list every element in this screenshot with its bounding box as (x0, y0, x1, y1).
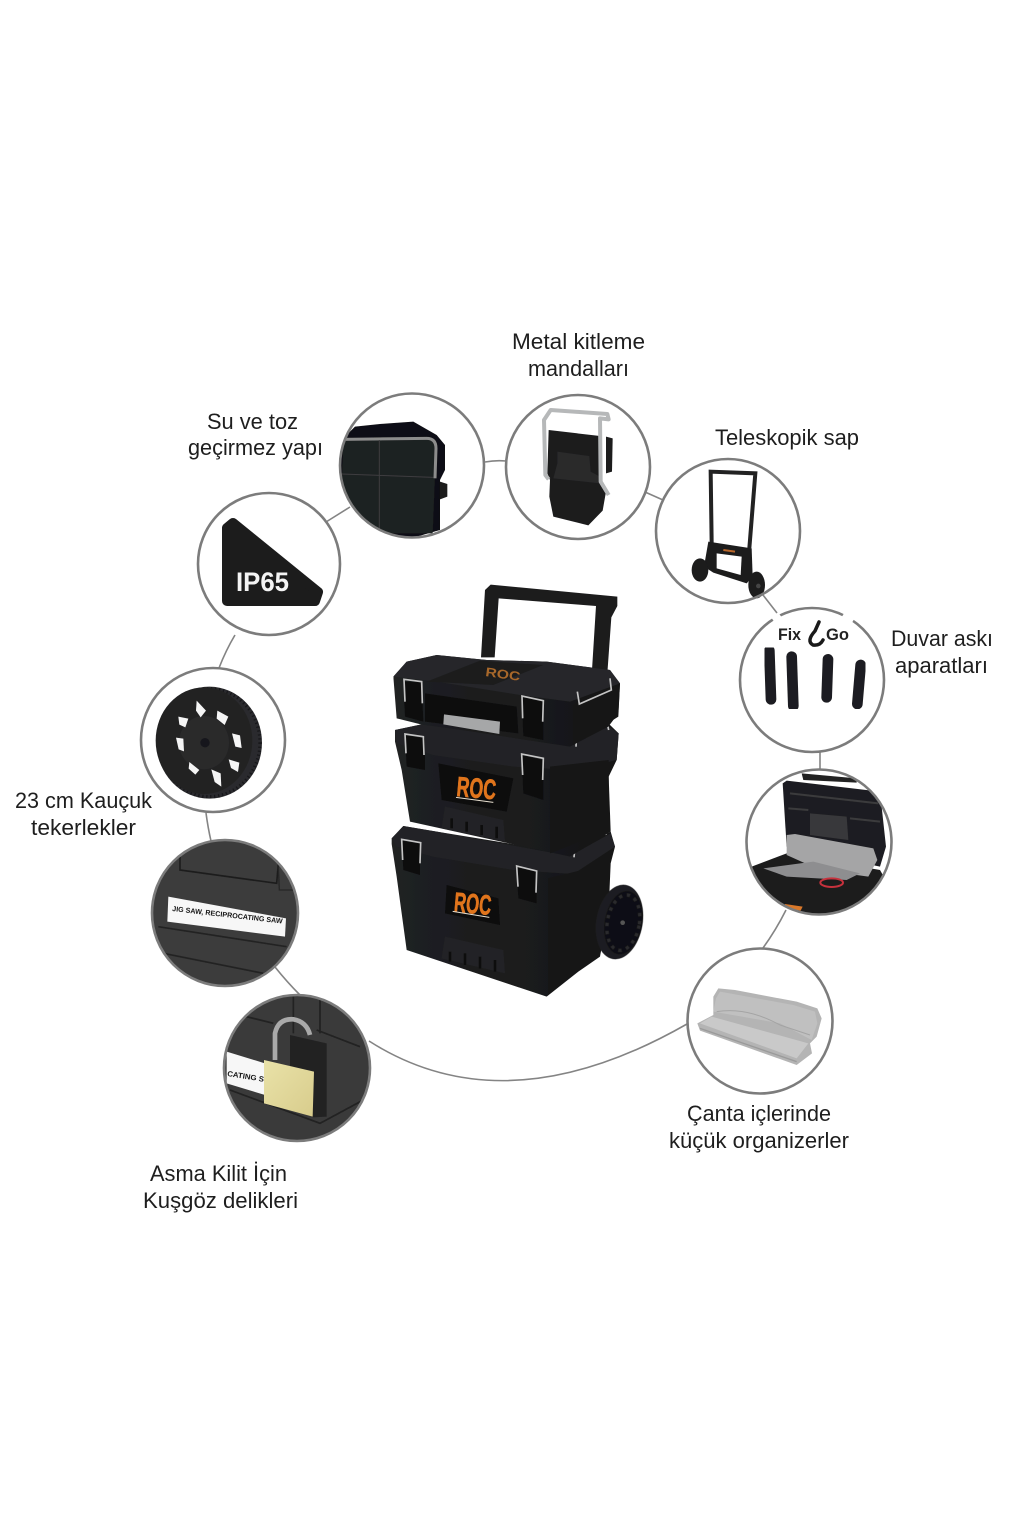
open case image (752, 773, 886, 914)
ROC logo, middle box (455, 771, 497, 805)
wheel spoke openings (176, 701, 242, 787)
ring (224, 995, 370, 1141)
label holder image (150, 838, 300, 988)
middle box (395, 723, 619, 857)
circle: rubber wheel (141, 668, 285, 812)
ROC logo, bottom box: ROC (453, 887, 493, 921)
caption: Duvar askı aparatları (891, 626, 993, 678)
caption: Metal kitleme mandalları (512, 329, 645, 381)
seal detail image (340, 422, 447, 543)
caption: 23 cm Kauçuk tekerlekler: tekerlekler (31, 815, 136, 840)
latch image (544, 410, 613, 525)
ROC logo, lid: ROC (485, 665, 521, 684)
ring (340, 394, 484, 538)
caption: Asma Kilit İçin Kuşgöz delikleri: Kuşgöz delikleri (143, 1188, 298, 1213)
ROC logo, bottom box (453, 887, 493, 921)
caption: 23 cm Kauçuk tekerlekler (15, 788, 153, 840)
caption: 23 cm Kauçuk tekerlekler: 23 cm Kauçuk (15, 788, 153, 813)
label text: JIG SAW, RECIPROCATING SAW (172, 904, 283, 926)
circle: small organizer (688, 948, 832, 1094)
wheel of trolley (590, 881, 649, 963)
caption: Çanta içlerinde küçük organizerler (669, 1101, 849, 1153)
caption: Asma Kilit İçin Kuşgöz delikleri: Asma Kilit İçin (150, 1161, 287, 1186)
circle: waterproof seal (340, 394, 484, 543)
trolley frame image (692, 472, 765, 598)
ring (198, 493, 340, 635)
Fix label: Fix (778, 625, 802, 644)
ring gaps (773, 615, 853, 621)
ring (141, 668, 285, 812)
ring (746, 770, 892, 914)
ring (740, 608, 884, 752)
brackets (769, 651, 861, 706)
ring (688, 948, 832, 1094)
circle: padlock eyelet (222, 993, 372, 1143)
caption: Çanta içlerinde küçük organizerler: Çanta içlerinde (687, 1101, 831, 1126)
ROC logo, middle box: ROC (455, 771, 497, 805)
caption: Su ve toz geçirmez yapı: geçirmez yapı (188, 435, 323, 460)
padlock image (222, 993, 372, 1143)
top organizer box (393, 655, 620, 747)
organizer image (697, 988, 822, 1065)
caption: Su ve toz geçirmez yapı (188, 409, 323, 460)
circle: IP65 badge (198, 493, 340, 635)
main product: stacked ROC tool box trolley (392, 585, 649, 997)
caption: Duvar askı aparatları: Duvar askı (891, 626, 993, 651)
circle: Fix & Go wall brackets (740, 608, 884, 752)
ring (506, 395, 650, 539)
circle: label holder (150, 838, 300, 988)
connecting lines between feature circles (206, 461, 820, 1081)
telescopic handle (481, 585, 617, 673)
bottom box (392, 826, 615, 997)
IP65 rounded triangle (227, 523, 318, 601)
ring (656, 459, 800, 603)
circle: open case with organizers (746, 770, 893, 927)
ring (152, 840, 298, 986)
caption: Metal kitleme mandalları: Metal kitleme (512, 329, 645, 354)
circle: metal latch (506, 395, 650, 539)
Go label: Go (826, 625, 849, 644)
label fragment text: CATING S (227, 1069, 265, 1084)
grey carry handle (443, 714, 500, 734)
caption: Asma Kilit İçin Kuşgöz delikleri (143, 1161, 298, 1213)
caption: Teleskopik sap: Teleskopik sap (715, 425, 859, 450)
caption: Duvar askı aparatları: aparatları (895, 653, 988, 678)
circle: telescopic handle (656, 459, 800, 603)
caption: Metal kitleme mandalları: mandalları (528, 356, 629, 381)
caption: Su ve toz geçirmez yapı: Su ve toz (207, 409, 298, 434)
IP65 text: IP65 (236, 567, 289, 597)
wheel image (156, 687, 262, 799)
caption: Çanta içlerinde küçük organizerler: küçük organizerler (669, 1128, 849, 1153)
hook icon (810, 622, 823, 645)
